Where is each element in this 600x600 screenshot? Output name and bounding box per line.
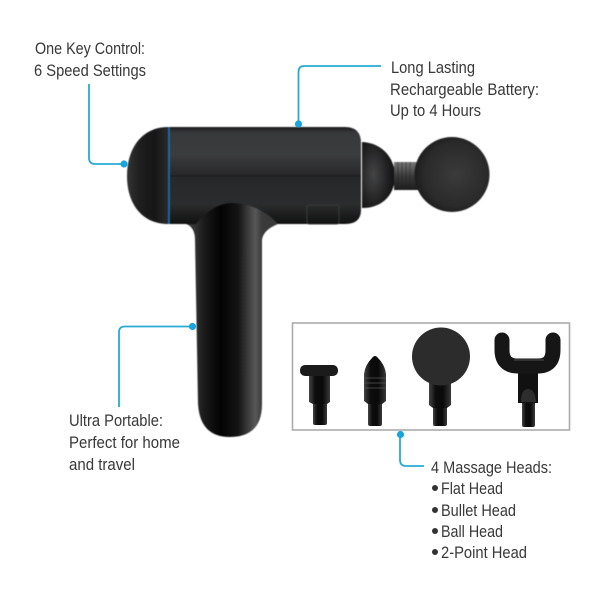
label text	[390, 58, 539, 120]
panel border	[292, 323, 570, 430]
label text: One Key Control:	[35, 39, 145, 58]
gun rear cap	[127, 127, 170, 224]
gun handle	[186, 203, 278, 437]
gun body	[169, 127, 361, 224]
head list: 2-Point Head	[441, 543, 527, 562]
label text: 6 Speed Settings	[34, 61, 146, 80]
head list	[432, 479, 527, 562]
head list: Bullet Head	[441, 501, 516, 520]
callout: one key control	[34, 39, 146, 168]
label text: Long Lasting	[391, 58, 475, 77]
leader line	[298, 66, 381, 124]
label text: Up to 4 Hours	[390, 101, 481, 120]
neck	[362, 142, 395, 208]
callout: battery	[295, 58, 539, 128]
connector shaft	[394, 162, 418, 190]
callout: massage heads	[397, 431, 552, 562]
heading text: 4 Massage Heads:	[431, 458, 552, 477]
label text: Rechargeable Battery:	[390, 80, 539, 99]
head list: Flat Head	[441, 479, 503, 498]
massage gun	[127, 127, 490, 437]
label text: Ultra Portable:	[69, 411, 163, 430]
label text	[34, 39, 146, 80]
body seam	[170, 175, 361, 177]
leader line	[89, 84, 124, 164]
label text: Perfect for home	[69, 433, 180, 452]
ball head	[412, 328, 470, 426]
callout: ultra portable	[69, 323, 196, 474]
bullet head	[364, 356, 386, 426]
label text	[69, 411, 180, 474]
flat head	[300, 365, 338, 425]
ball head	[414, 137, 490, 212]
leader line	[119, 326, 192, 407]
blue ring	[168, 127, 170, 224]
leader line	[400, 434, 424, 466]
power button	[307, 205, 339, 224]
head list: Ball Head	[441, 522, 503, 541]
panel: massage heads	[292, 323, 570, 430]
2-point head	[502, 340, 553, 427]
label text: and travel	[69, 455, 135, 474]
